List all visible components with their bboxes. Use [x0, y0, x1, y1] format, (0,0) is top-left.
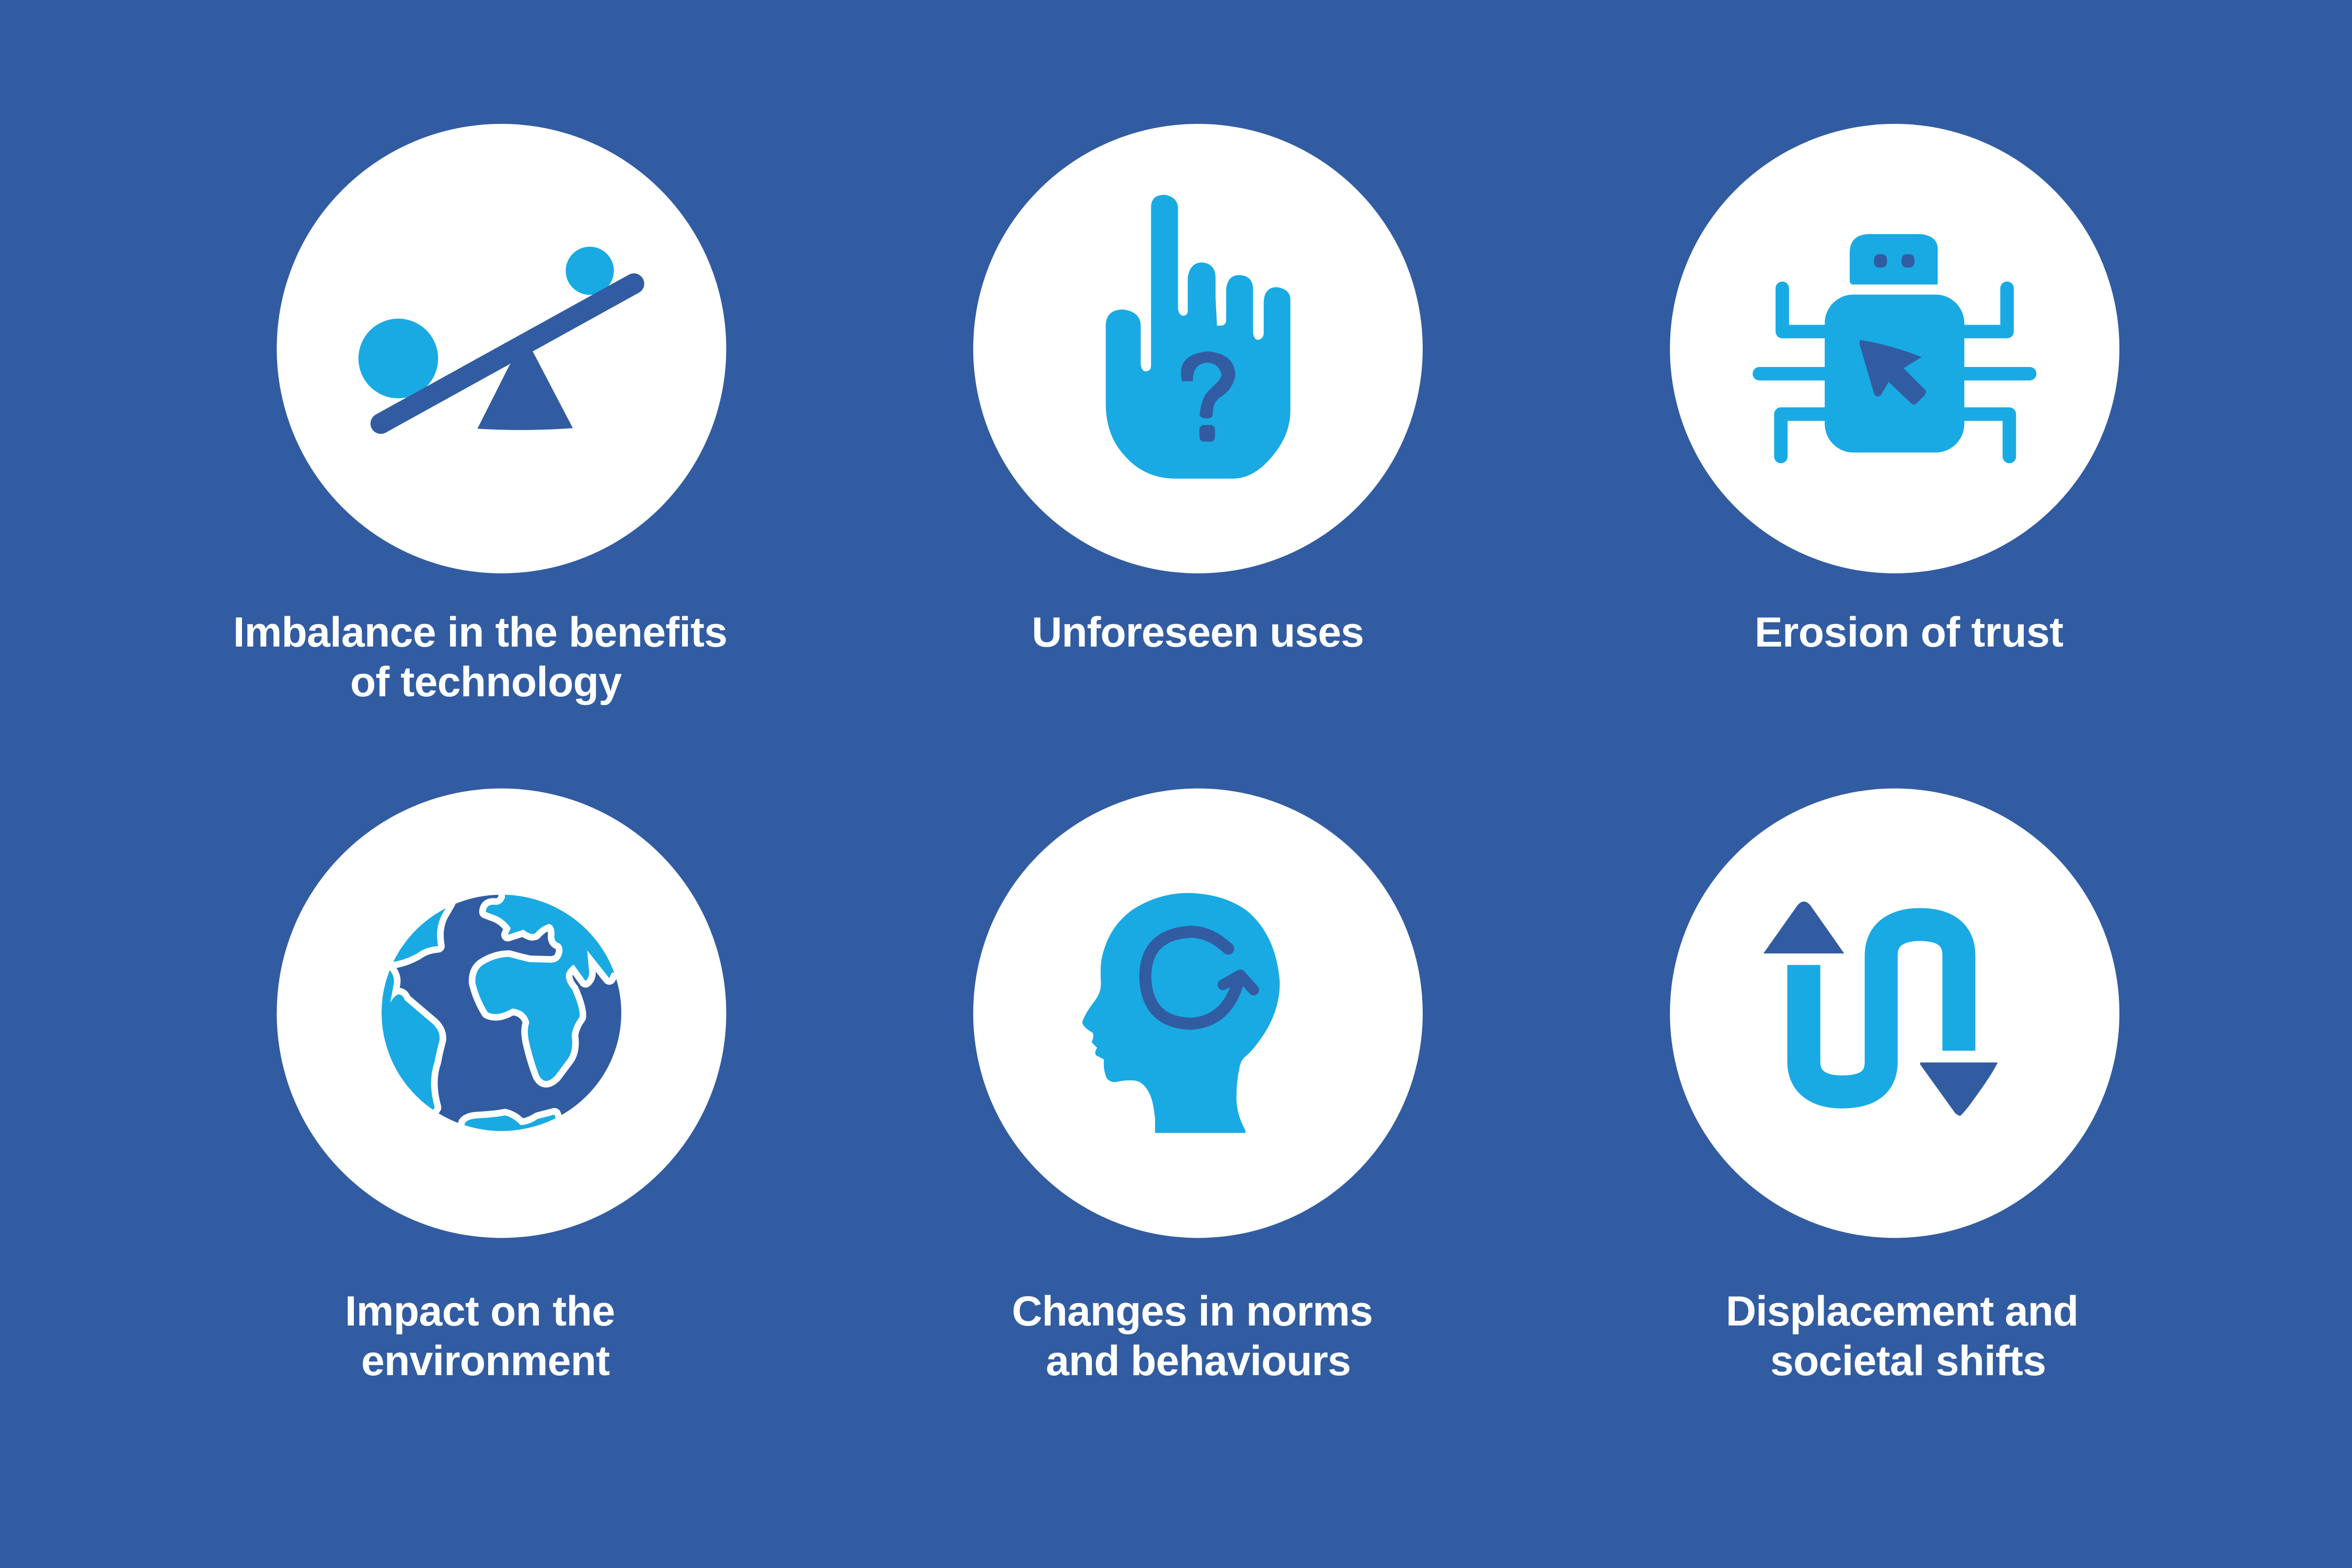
label: environment: Impact on the [345, 1288, 615, 1335]
label: unforeseen: Unforeseen uses [1032, 609, 1364, 656]
white circle: unforeseen [973, 124, 1423, 573]
label: displacement [1726, 1288, 2079, 1385]
label: imbalance: Imbalance in the benefits [233, 609, 728, 656]
label: displacement: Displacement and [1726, 1288, 2079, 1335]
icon: seesaw with two balls [359, 247, 634, 430]
label: environment: environment [361, 1338, 610, 1385]
icon: winding arrows [1763, 902, 1998, 1116]
label: norms: Changes in norms [1012, 1288, 1373, 1335]
icon: bug with cursor [1759, 234, 2030, 456]
panel: displacement and societal shifts [1670, 788, 2119, 1385]
label: imbalance: of technology [350, 659, 622, 706]
white circle: norms [973, 788, 1423, 1238]
label: displacement: societal shifts [1770, 1338, 2046, 1385]
white circle: erosion [1670, 124, 2119, 573]
panel: erosion of trust [1670, 124, 2119, 656]
label: imbalance [233, 609, 728, 706]
white circle: imbalance [277, 124, 727, 573]
label: erosion: Erosion of trust [1755, 609, 2063, 656]
label: norms [1012, 1288, 1373, 1385]
white circle: environment [277, 788, 727, 1238]
label: norms: and behaviours [1046, 1338, 1351, 1385]
white circle: displacement [1670, 788, 2119, 1238]
panel: changes in norms and behaviours [973, 788, 1423, 1385]
label: environment [345, 1288, 615, 1385]
panel: impact on the environment [277, 788, 727, 1385]
icon: pointing hand with question mark [1106, 195, 1290, 479]
icon: globe [382, 895, 621, 1131]
icon: head with rotating arrow [1082, 893, 1280, 1133]
panel: imbalance in the benefits of technology [233, 124, 728, 706]
panel: unforeseen uses [973, 124, 1423, 656]
